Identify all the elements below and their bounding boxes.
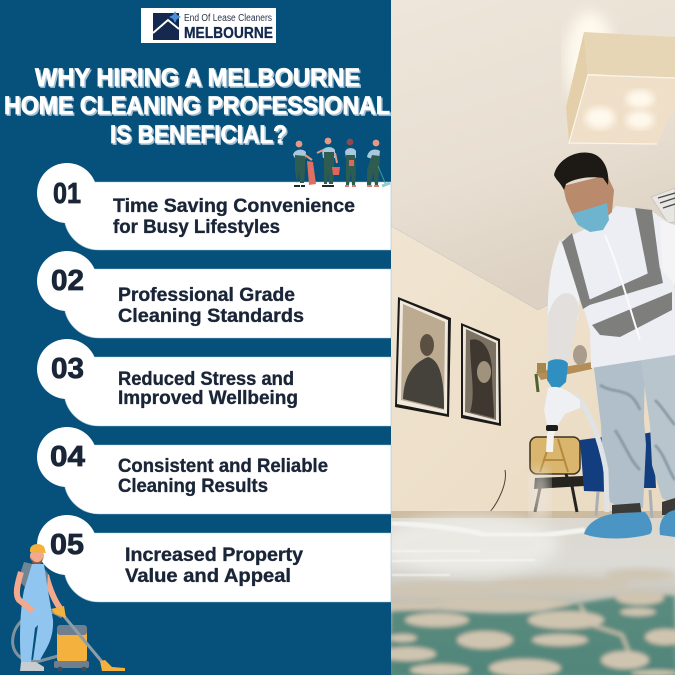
cleaner 4 with mop <box>367 140 390 186</box>
item 04 number circle <box>37 427 97 487</box>
photo: floor and carpet <box>380 518 675 675</box>
cleaner 2 with bucket <box>317 138 340 186</box>
worker: blue overalls <box>20 564 53 662</box>
item 01 bar <box>64 182 391 250</box>
cleaner: blue glove <box>547 359 568 388</box>
title: IS BENEFICIAL? <box>110 121 287 149</box>
item 04 text: Cleaning Results <box>118 476 268 497</box>
item 01 number circle <box>37 163 97 223</box>
illustration: team of four cleaners <box>293 138 390 186</box>
cleaner: left protective trouser <box>593 355 646 512</box>
title: IS BENEFICIAL? <box>112 122 288 150</box>
item 04 text: Consistent and Reliable <box>118 456 328 477</box>
item 03 text: Improved Wellbeing <box>118 388 298 409</box>
illustration: worker with vacuum cleaner <box>13 544 125 671</box>
worker: vacuum wand <box>63 615 103 663</box>
cleaner: right sleeve <box>669 223 675 285</box>
item 02 <box>37 251 391 338</box>
logo name: End Of Lease Cleaners <box>184 13 272 24</box>
cleaner: steam hose <box>575 395 607 512</box>
item 01 <box>37 163 391 250</box>
item 01 text: for Busy Lifestyles <box>113 217 280 238</box>
worker: head <box>30 549 44 563</box>
worker: hose loop <box>13 611 62 661</box>
item 05 bar <box>64 533 391 602</box>
worker: vacuum nozzle <box>100 660 125 671</box>
cleaner: steamer nozzle <box>546 431 556 452</box>
photo: air vent <box>651 188 675 223</box>
worker: vacuum body <box>54 625 89 671</box>
title: WHY HIRING A MELBOURNE <box>35 64 360 92</box>
cleaner: hair <box>554 152 608 190</box>
cleaner: grey vest bands <box>582 268 672 337</box>
worker: shoes <box>20 662 44 671</box>
item 03 number circle <box>37 339 97 399</box>
item 05 number circle <box>37 515 97 575</box>
worker: beard <box>31 557 43 565</box>
worker: back arm <box>46 575 60 608</box>
cleaner 1 with vacuum <box>293 141 316 186</box>
logo icon: house roof <box>153 11 181 40</box>
item 03 <box>37 339 391 426</box>
photo: lamp <box>566 12 675 144</box>
cleaner: steamer handle <box>544 387 580 428</box>
item 05 <box>37 515 391 602</box>
photo: cane chair <box>530 437 584 512</box>
cleaner: white coverall vest <box>562 206 675 368</box>
cleaner: blue shoe covers <box>584 510 675 538</box>
photo: skirting board <box>391 511 665 518</box>
item 05 text: Value and Appeal <box>125 566 291 587</box>
photo: wall shelf and vase <box>536 345 592 392</box>
worker: grey shirt <box>18 562 48 588</box>
logo plate <box>141 8 276 43</box>
item 03 number: 03 <box>51 353 84 385</box>
cleaner: upper sleeve <box>548 240 580 320</box>
cleaner: right protective trouser <box>644 355 675 500</box>
item 02 text: Cleaning Standards <box>118 306 304 327</box>
title: HOME CLEANING PROFESSIONAL <box>4 92 390 120</box>
item 05 number: 05 <box>50 529 84 561</box>
item 01 text: Time Saving Convenience <box>113 196 355 217</box>
title <box>4 64 392 150</box>
item 01 number: 01 <box>53 178 81 210</box>
cleaner: zip <box>605 235 640 340</box>
cleaner: face <box>564 178 614 216</box>
worker: front arm <box>17 572 33 611</box>
panel: blue background <box>0 0 391 675</box>
photo: cleaner <box>544 152 675 538</box>
cleaner: nozzle collar <box>546 425 558 431</box>
photo: steam haze <box>380 467 585 575</box>
title: WHY HIRING A MELBOURNE <box>36 66 362 94</box>
item 02 number circle <box>37 251 97 311</box>
item 05 text: Increased Property <box>125 545 303 566</box>
worker: yellow cap <box>30 544 46 553</box>
photo: power outlet and cord <box>490 470 506 511</box>
item 04 <box>37 427 391 514</box>
photo: framed portrait 2 <box>461 323 501 426</box>
cleaner: trouser creases <box>600 385 675 480</box>
item 04 number: 04 <box>50 441 85 473</box>
item 03 text: Reduced Stress and <box>118 369 294 390</box>
item 03 bar <box>64 357 391 426</box>
photo: wall <box>391 226 675 530</box>
photo: framed portrait 1 <box>395 297 451 417</box>
cleaner 3 holding spray <box>345 139 356 186</box>
item 02 bar <box>64 269 391 338</box>
photo: cleaner steaming a carpet <box>380 0 675 675</box>
worker: wand handle <box>51 606 66 618</box>
logo city: MELBOURNE <box>184 25 273 42</box>
item 02 number: 02 <box>51 265 84 297</box>
item 04 bar <box>64 445 391 514</box>
photo: blue armchair <box>580 432 656 520</box>
logo <box>141 8 276 43</box>
cleaner: grey vest straps <box>562 208 660 309</box>
item 02 text: Professional Grade <box>118 285 295 306</box>
cleaner: lower translucent sleeve <box>548 293 579 366</box>
cleaner: surgical mask <box>572 203 609 232</box>
cleaner: shoes <box>612 498 675 516</box>
title: HOME CLEANING PROFESSIONAL <box>6 94 392 122</box>
photo: ceiling <box>391 0 675 310</box>
